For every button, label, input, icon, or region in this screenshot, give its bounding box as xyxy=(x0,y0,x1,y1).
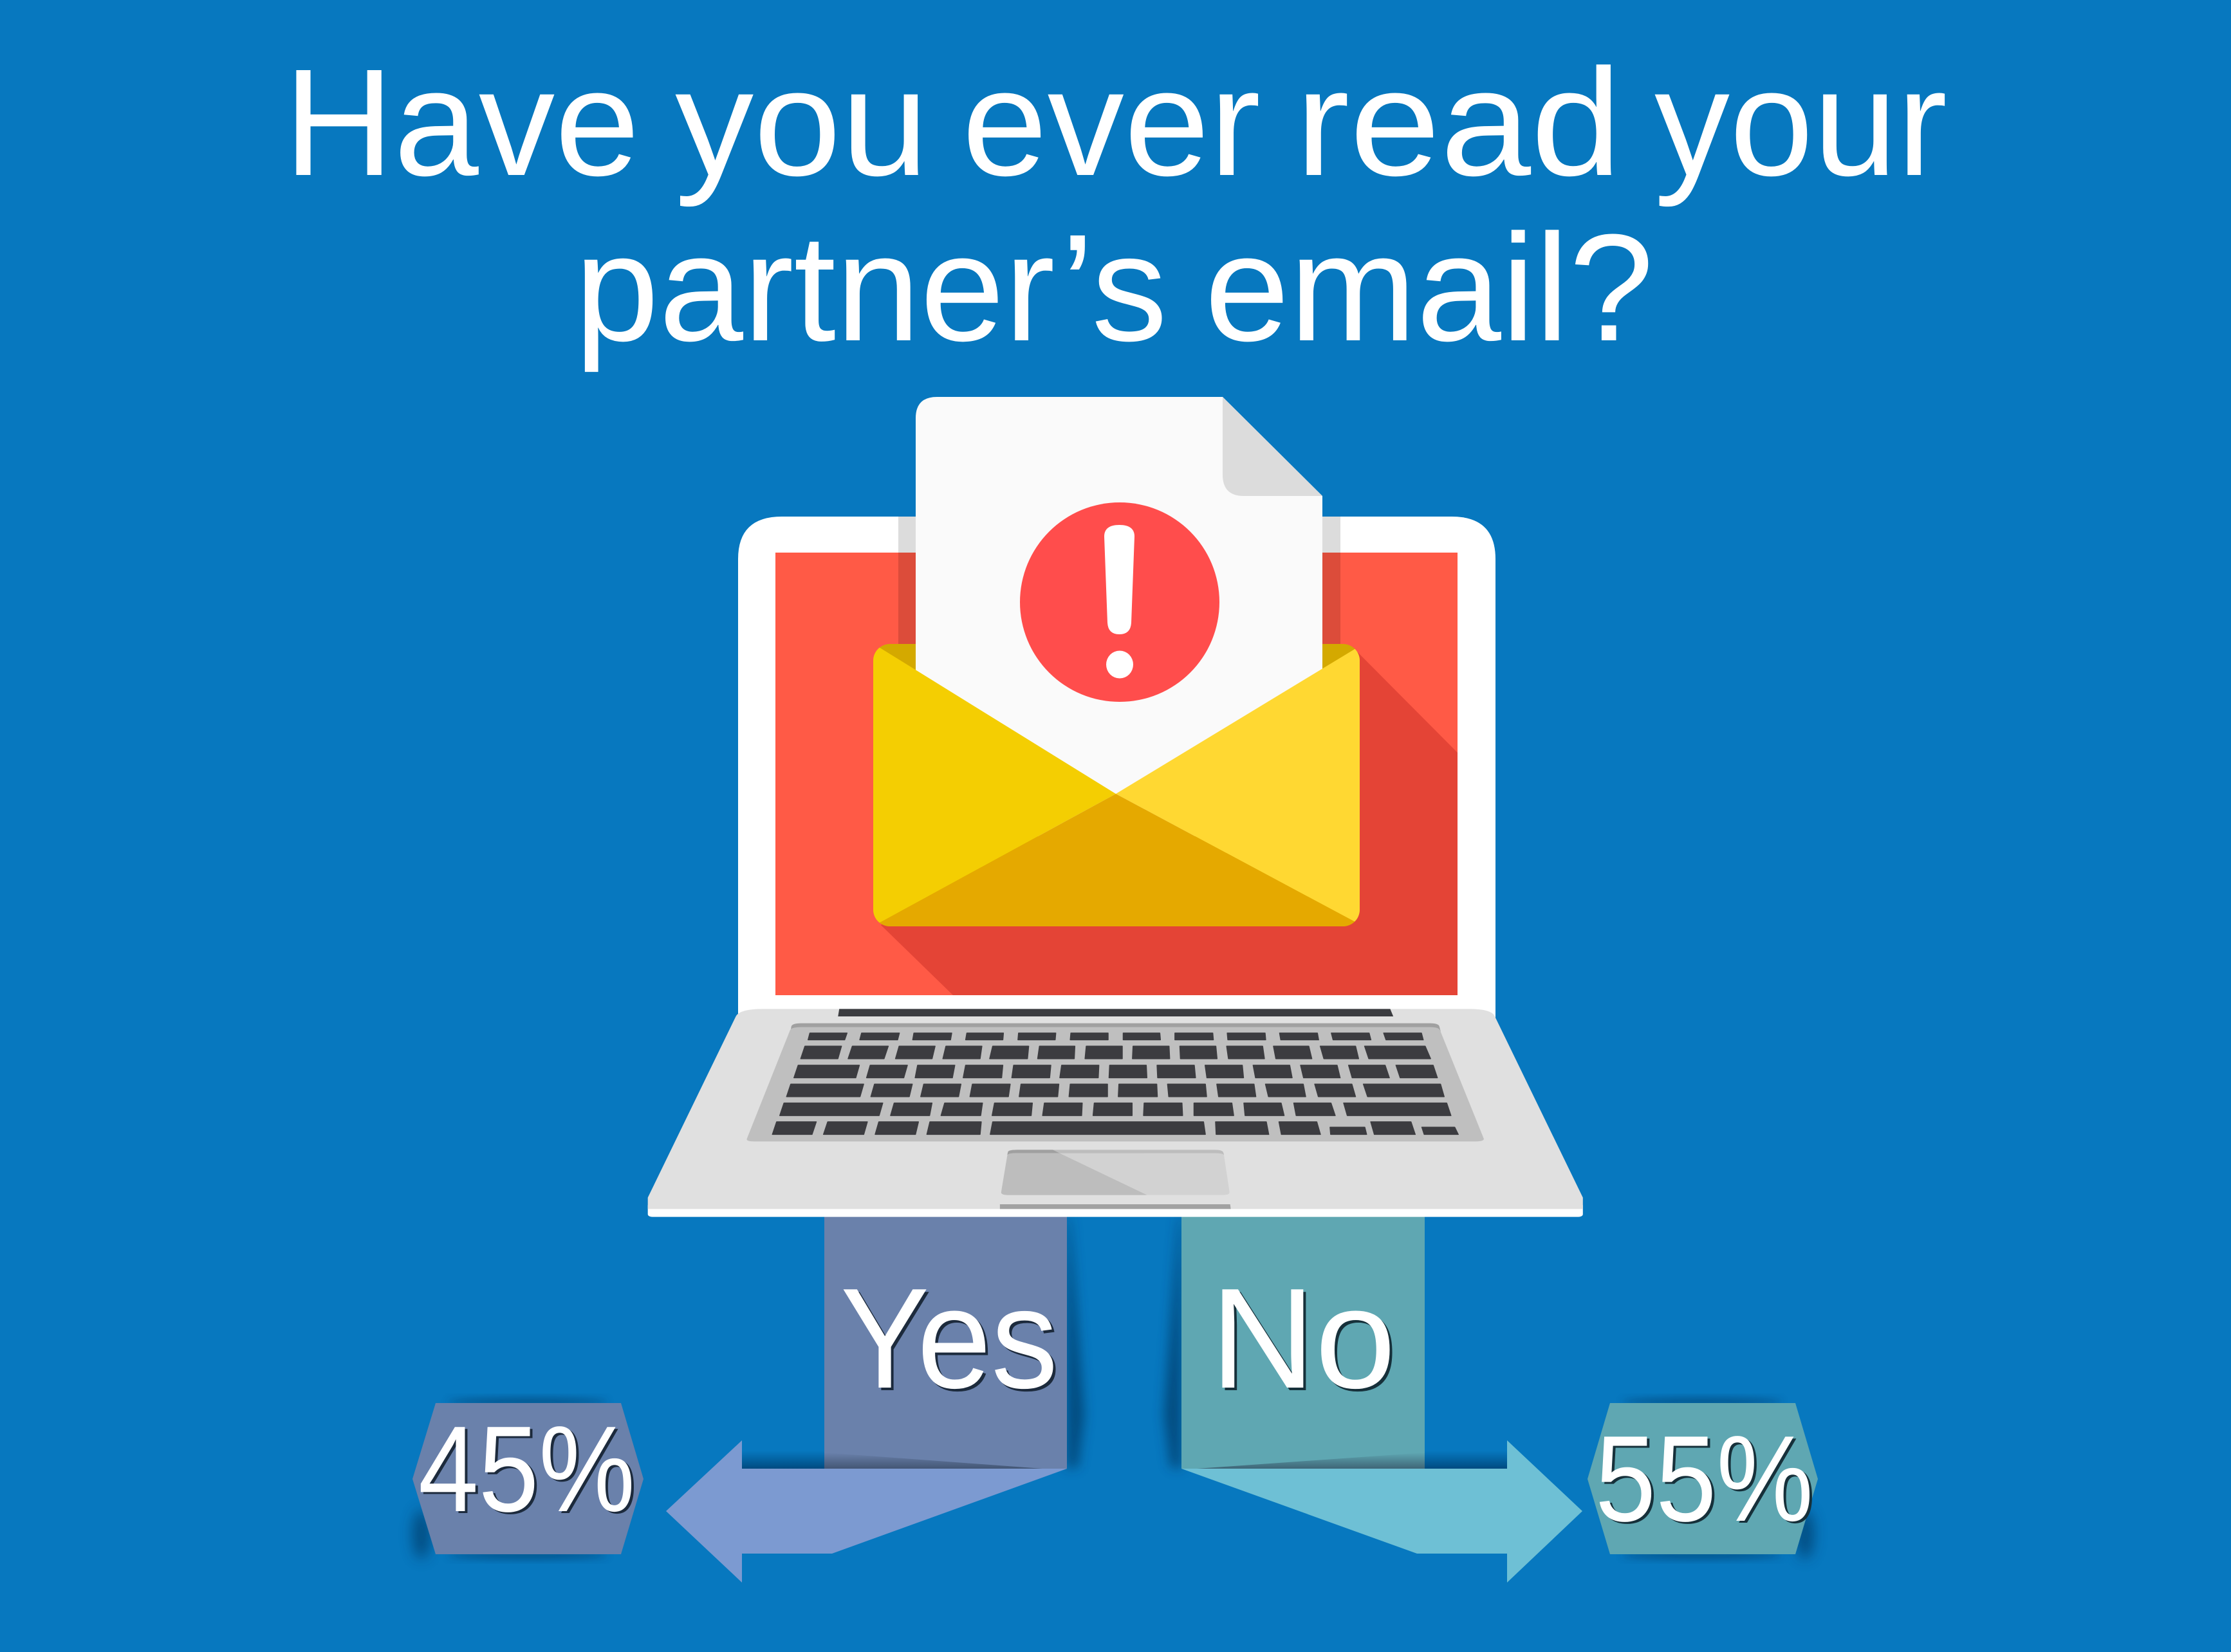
no label: No xyxy=(1210,1259,1396,1418)
45 percent hexagon shadows xyxy=(412,1399,608,1559)
document page xyxy=(916,397,1322,836)
55 percent hexagon shadows xyxy=(1622,1399,1814,1559)
55 percent hexagon xyxy=(1588,1403,1818,1554)
title: email? xyxy=(1205,203,1654,373)
base front lip xyxy=(648,1205,1583,1217)
infographic canvas xyxy=(296,64,1945,1583)
laptop illustration xyxy=(648,397,1583,1217)
no fold shading xyxy=(1197,1451,1507,1469)
base deck xyxy=(648,1009,1583,1209)
title xyxy=(284,37,1947,373)
no arrow xyxy=(1181,1440,1582,1583)
yes label: Yes xyxy=(840,1259,1058,1418)
yes ribbon with arrow and percentage xyxy=(412,1216,1084,1583)
title: you xyxy=(675,37,929,208)
laptop screen bezel xyxy=(738,517,1495,1029)
keyboard keys xyxy=(773,1033,1458,1135)
no ribbon xyxy=(1181,1216,1425,1469)
yes fold shading xyxy=(742,1451,1042,1469)
yes arrow xyxy=(666,1440,1067,1583)
45 percent value: 45% xyxy=(418,1401,635,1537)
no ribbon with arrow and percentage xyxy=(1164,1216,1818,1583)
title: your xyxy=(1654,37,1947,208)
document folded corner xyxy=(1223,397,1322,496)
laptop base xyxy=(648,1009,1583,1217)
document shadow band xyxy=(898,517,1340,646)
front notch xyxy=(1000,1204,1231,1209)
title: read xyxy=(1295,37,1622,208)
envelope back xyxy=(873,644,1360,926)
title: ever xyxy=(962,37,1261,208)
yes ribbon xyxy=(824,1216,1067,1469)
keyboard tray xyxy=(746,1023,1484,1141)
icon: alert circle xyxy=(1020,502,1219,702)
hinge xyxy=(838,1009,1393,1016)
yes ribbon shadow xyxy=(1067,1216,1084,1469)
trackpad xyxy=(1001,1150,1230,1195)
envelope long shadow xyxy=(881,652,1458,995)
envelope flaps xyxy=(873,647,1360,926)
title: partner’s xyxy=(575,203,1167,373)
no ribbon shadow xyxy=(1164,1216,1181,1469)
55 percent value: 55% xyxy=(1595,1411,1813,1547)
45 percent hexagon xyxy=(412,1403,643,1554)
laptop display xyxy=(775,553,1458,995)
title: Have xyxy=(284,37,640,208)
